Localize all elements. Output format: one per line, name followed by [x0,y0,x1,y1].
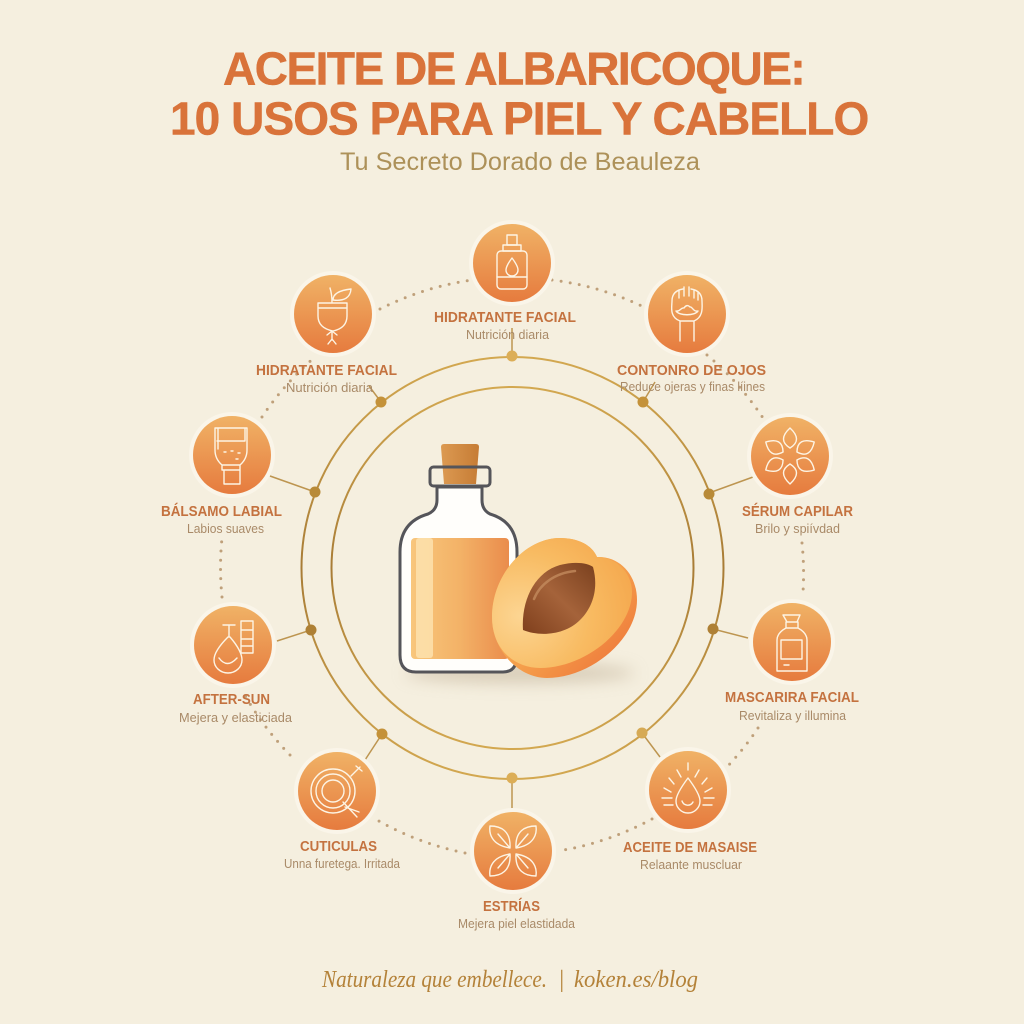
icon: radiant drop [645,747,731,833]
bottle [400,444,517,672]
use: hidratante facial (top) [434,220,576,342]
footer tagline: koken.es/blog [574,967,698,993]
icon: plant cup [290,271,376,357]
use: hidratante facial (top): Nutrición diaria [466,328,549,342]
use: aceite de masaje: Relaante muscluar [640,858,742,872]
use: cuticulas: CUTICULAS [300,839,377,855]
concentric rings [302,357,724,779]
use: after-sun: AFTER-SUN [193,692,270,708]
use: aceite de masaje [623,747,757,872]
use: contorno de ojos [617,271,766,394]
use: balsamo labial [161,412,282,536]
icon: dropper and stack [190,602,276,688]
dotted outer ring [221,280,804,853]
footer tagline: Naturaleza que embellece. [321,967,547,993]
use: hidratante facial (top): HIDRATANTE FACIAL [434,310,576,326]
use: mascarilla facial [725,599,859,723]
use: estrias: Mejera piel elastidada [458,917,575,931]
icon: head with hair [644,271,730,357]
title [170,42,868,144]
use: mascarilla facial: MASCARIRA FACIAL [725,690,859,706]
connector lines [270,328,753,808]
subtitle: Tu Secreto Dorado de Beauleza [340,148,700,176]
use: cuticulas [284,748,400,871]
use: balsamo labial: Labios suaves [187,522,264,536]
central illustration: oil bottle and apricot [400,444,637,683]
ground shadow [405,663,635,683]
use: mascarilla facial: Revitaliza y illumina [739,709,846,723]
use: estrias: ESTRÍAS [483,898,540,915]
use: serum capilar: SÉRUM CAPILAR [742,503,853,520]
footer tagline: | [558,967,565,993]
use: hidratante facial (upper left) [256,271,397,395]
icon: tube [189,412,275,498]
use: after-sun: Mejera y elasticiada [179,711,292,725]
apricot half [492,538,637,678]
use: hidratante facial (upper left): HIDRATANTE FACIAL [256,363,397,379]
use: hidratante facial (upper left): Nutrición diaria [286,381,373,395]
use: contorno de ojos: CONTONRO DE OJOS [617,363,766,379]
use: contorno de ojos: Reduce ojeras y finas líines [620,380,765,394]
use: estrias [458,808,575,931]
use: after-sun [179,602,292,725]
title: 10 USOS PARA PIEL Y CABELLO [170,92,868,144]
icon: concentric Q [294,748,380,834]
use: aceite de masaje: ACEITE DE MASAISE [623,840,757,856]
use: balsamo labial: BÁLSAMO LABIAL [161,503,282,520]
title: ACEITE DE ALBARICOQUE: [223,42,804,94]
icon: labelled jar [749,599,835,685]
footer tagline [321,967,698,993]
icon: four leaves [470,808,556,894]
ring nodes [306,350,718,784]
use: cuticulas: Unna furetega. Irritada [284,857,400,871]
icon: leaf star [747,413,833,499]
icon: serum bottle with drop [469,220,555,306]
use: serum capilar: Brilo y spiívdad [755,522,840,536]
use: serum capilar [742,413,853,536]
